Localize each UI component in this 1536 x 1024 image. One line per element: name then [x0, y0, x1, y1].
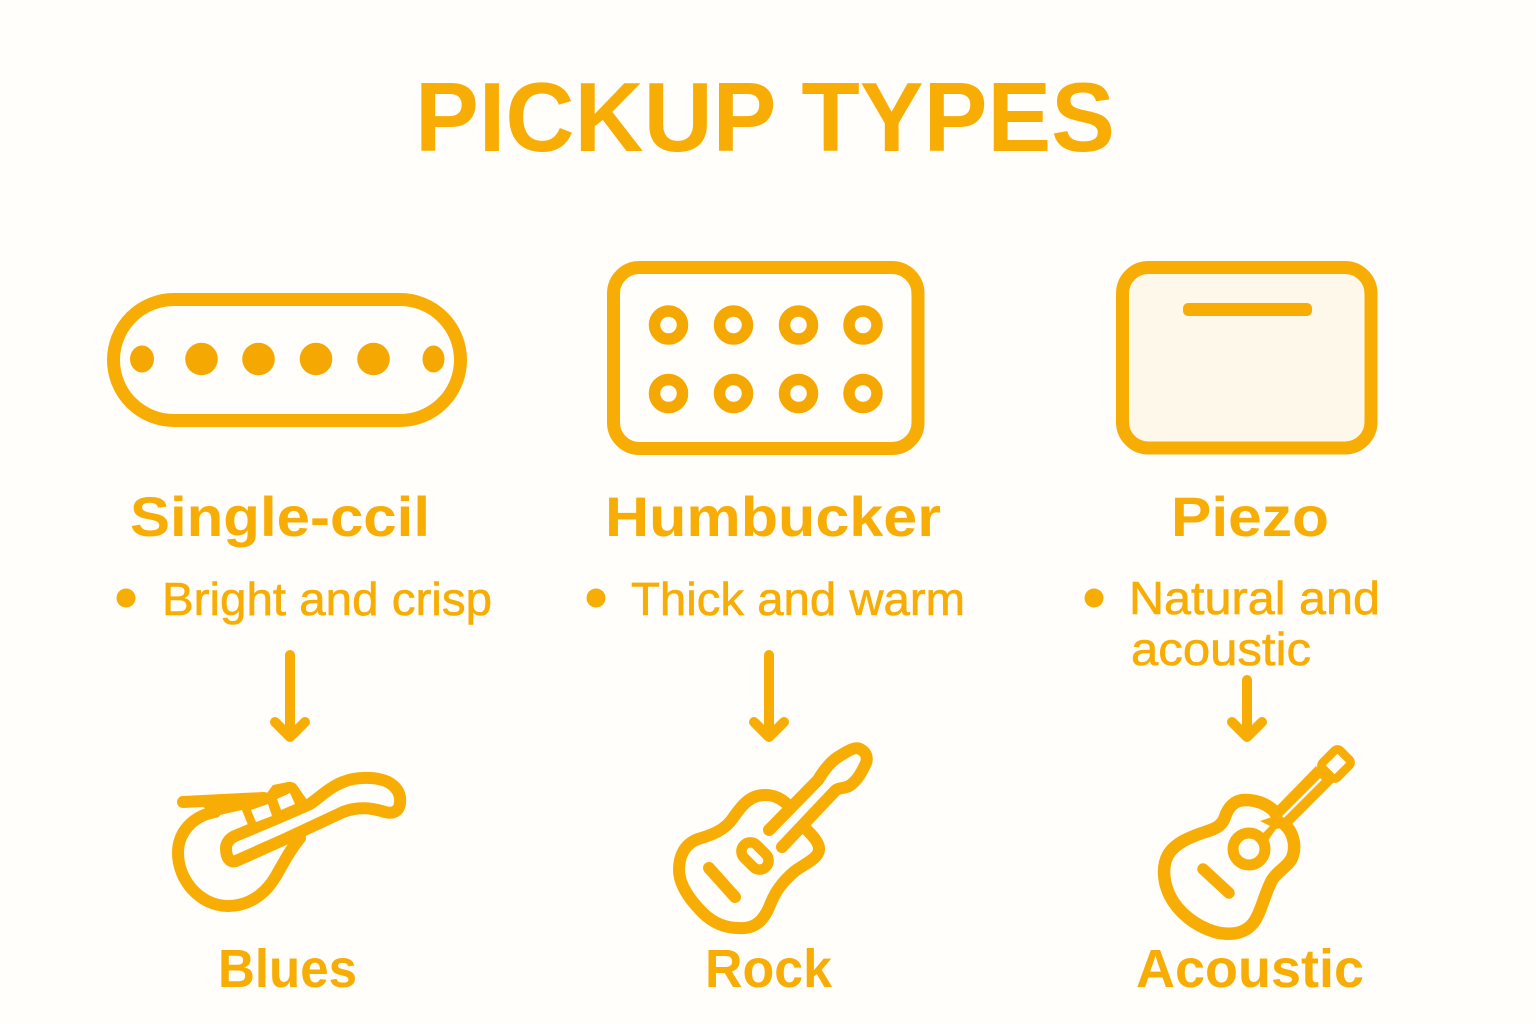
- heading: single-coil: Single-ccil: [130, 485, 430, 548]
- arrow: humbucker to rock: [754, 655, 784, 737]
- icon: single-coil pickup: [114, 300, 460, 420]
- title: PICKUP TYPES: [415, 62, 1115, 172]
- column: single-coil: [114, 300, 492, 999]
- icon: humbucker pickup: [614, 268, 918, 448]
- arrow: single-coil to blues: [275, 655, 305, 737]
- column: piezo: [1084, 268, 1380, 999]
- label: acoustic: Acoustic: [1136, 939, 1364, 999]
- icon: blues guitar: [178, 778, 400, 906]
- label: rock: Rock: [705, 939, 833, 999]
- bullet: natural and acoustic: Natural and: [1129, 572, 1380, 624]
- heading: piezo: Piezo: [1171, 485, 1329, 548]
- icon: rock guitar: [679, 748, 867, 928]
- label: blues: Blues: [218, 939, 357, 999]
- bullet: natural and acoustic: [1084, 572, 1380, 675]
- bullet: thick and warm: Thick and warm: [631, 573, 965, 625]
- heading: humbucker: Humbucker: [605, 485, 941, 548]
- arrow: piezo to acoustic: [1232, 680, 1262, 737]
- icon: acoustic guitar: [1164, 748, 1352, 934]
- column: humbucker: [586, 268, 965, 999]
- bullet: bright and crisp: Bright and crisp: [162, 573, 492, 625]
- bullet: natural and acoustic: acoustic: [1131, 623, 1311, 675]
- icon: piezo pickup: [1122, 268, 1371, 448]
